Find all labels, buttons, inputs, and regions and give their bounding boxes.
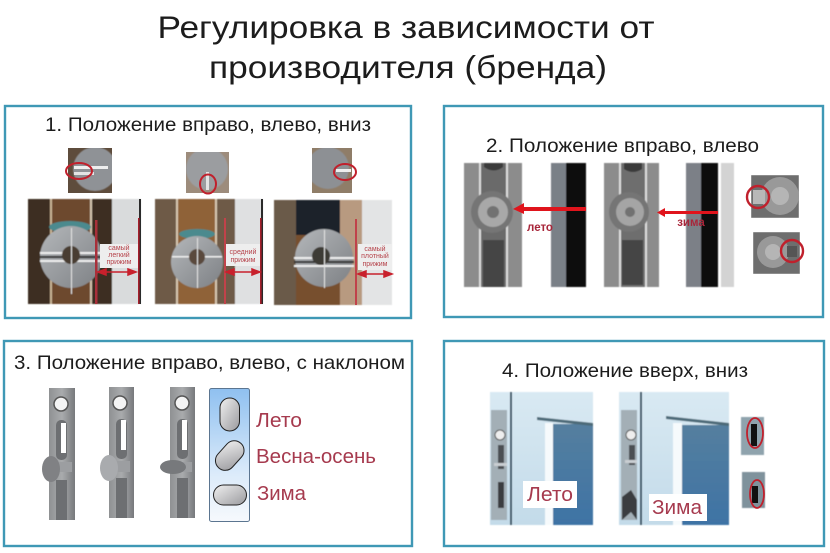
photo 1: lightest clamp xyxy=(28,199,141,304)
label: summer: Лето xyxy=(527,484,573,506)
thumbnail: left position xyxy=(747,175,799,218)
title: Регулировка в зависимости от xyxy=(158,9,654,45)
photo: winter xyxy=(604,163,734,287)
thumbnail: upper position xyxy=(741,417,764,455)
label: winter: зима xyxy=(677,217,705,229)
label: summer: Лето xyxy=(256,410,302,432)
oval: summer xyxy=(220,398,240,431)
arrow: winter xyxy=(657,208,718,217)
thumbnail 2 xyxy=(186,148,229,194)
photo 3: tightest clamp: плотный xyxy=(361,252,389,260)
panel 1 heading: 1. Положение вправо, влево, вниз xyxy=(45,114,371,136)
panel 3 heading: 3. Положение вправо, влево, с наклоном xyxy=(14,352,405,374)
arrow: summer xyxy=(513,203,586,214)
photo 1: lightest clamp: прижим xyxy=(106,259,132,266)
legend card xyxy=(210,388,250,522)
photo 3: tightest clamp xyxy=(274,200,392,305)
panel 2 heading: 2. Положение вправо, влево xyxy=(486,135,759,157)
photo 2: medium clamp: прижим xyxy=(230,257,256,264)
photo 1: lightest clamp: легкий xyxy=(108,251,130,259)
photo 2: medium clamp: средний xyxy=(230,248,257,256)
label: spring and autumn: Весна-осень xyxy=(256,446,376,468)
panel 2: right, left xyxy=(444,106,823,317)
thumbnail: right position xyxy=(753,232,803,274)
striker: summer xyxy=(42,388,75,520)
panel 4 heading: 4. Положение вверх, вниз xyxy=(502,360,748,382)
title xyxy=(158,9,654,85)
oval: spring and autumn xyxy=(211,437,248,474)
photo: summer xyxy=(490,392,593,525)
photo 2: medium clamp xyxy=(155,199,263,304)
thumbnail 3 xyxy=(312,148,357,193)
photo: summer xyxy=(464,163,586,287)
photo 1: lightest clamp: самый xyxy=(108,244,130,252)
label: winter: Зима xyxy=(257,483,307,505)
title: производителя (бренда) xyxy=(209,49,607,85)
striker: spring and autumn xyxy=(100,387,134,518)
striker: winter xyxy=(160,387,195,518)
oval: winter xyxy=(214,485,246,505)
thumbnail 1 xyxy=(66,147,117,193)
photo: winter xyxy=(619,392,729,525)
panel 1: right, left, down xyxy=(5,106,411,318)
panel 4: up, down xyxy=(444,341,824,546)
label: winter: Зима xyxy=(652,497,703,519)
photo 3: tightest clamp: прижим xyxy=(362,261,388,268)
thumbnail: lower position xyxy=(742,472,765,508)
panel 3: right, left, tilted xyxy=(4,341,412,546)
photo 3: tightest clamp: самый xyxy=(364,245,386,253)
label: summer: лето xyxy=(527,222,553,234)
